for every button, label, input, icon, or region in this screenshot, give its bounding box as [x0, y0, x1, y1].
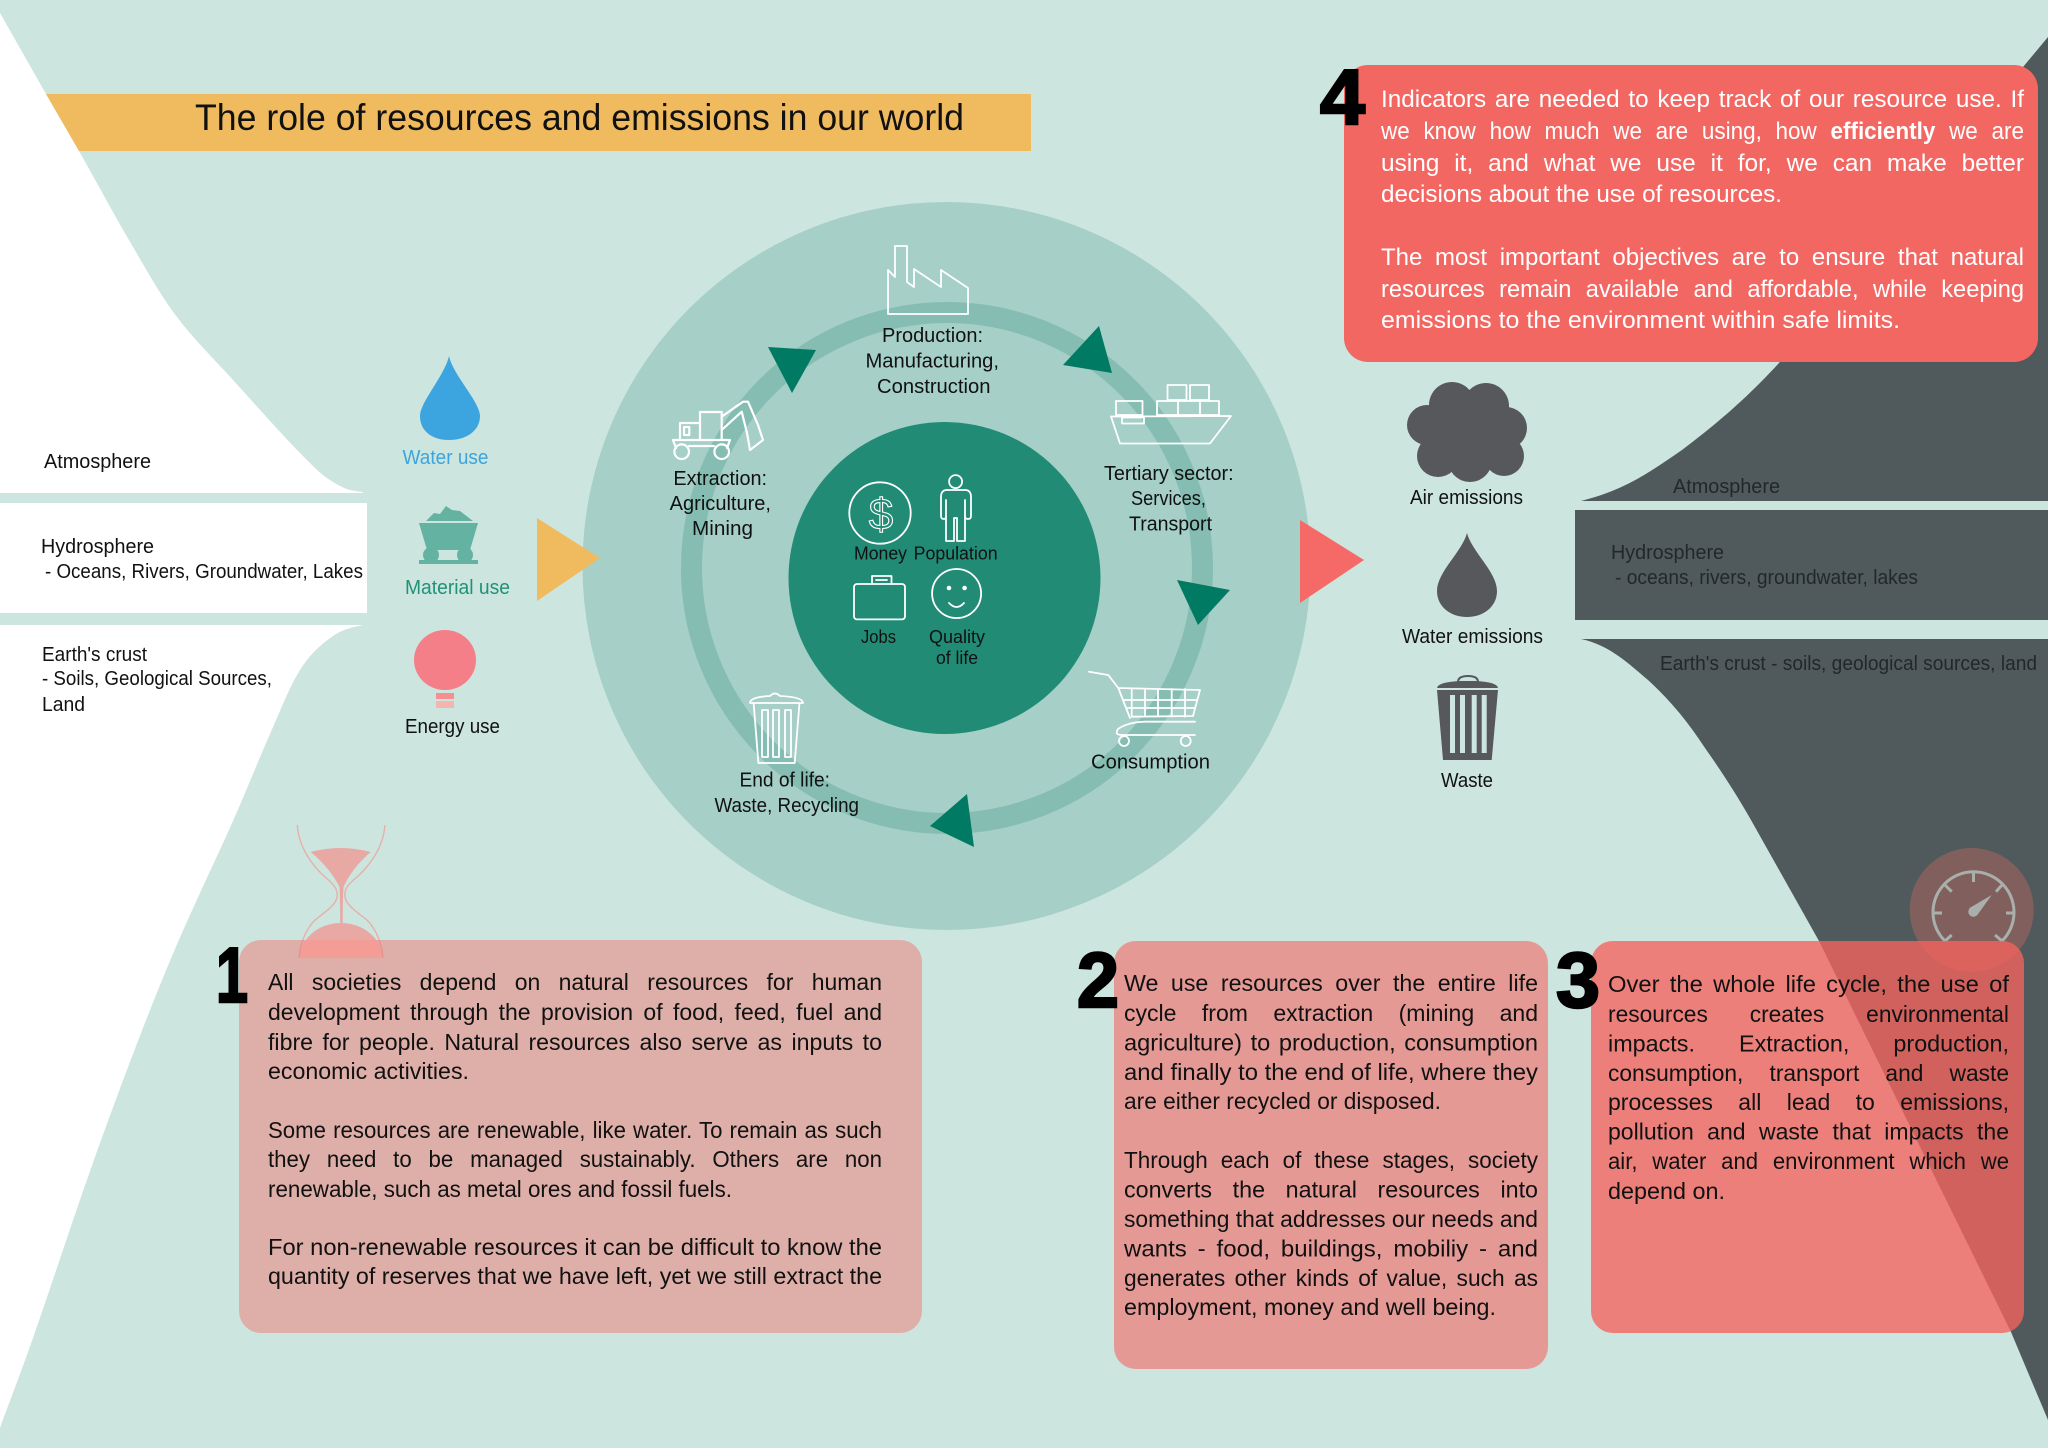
right sphere labels: Earth's crust - soils, geological sources, land: [1660, 653, 2037, 675]
icon: light bulb with energy use label: Energy use: [405, 716, 500, 738]
text: box 2 body: generates other kinds of value, such as: [1124, 1265, 1538, 1291]
icon: quality of life smile: [929, 569, 985, 668]
text: box 2 body: wants - food, buildings, mobiliy - and: [1123, 1236, 1538, 1262]
number 1: 1: [216, 931, 248, 1019]
text: box 1 body: [268, 969, 882, 1289]
icon: factory with production label: Construction: [877, 376, 990, 398]
icon: quality of life smile: of life: [936, 648, 978, 668]
text: box 4 body: The most important objectives are to ensure that natural: [1381, 244, 2024, 271]
icon: dark trash bin with waste label: Waste: [1441, 770, 1493, 792]
icon: factory with production label: Production:: [882, 325, 983, 347]
text: box 1 body: fibre for people. Natural resources also serve as inputs to: [268, 1029, 882, 1055]
arrow: tertiary to consumption: [1177, 580, 1230, 625]
text: box 4 body: Indicators are needed to keep track of our resource use. If: [1381, 86, 2024, 113]
text: box 3 body: depend on.: [1608, 1178, 1725, 1204]
text: box 3 body: air, water and environment which we: [1608, 1148, 2009, 1174]
icon: cargo ship with tertiary sector label: Tertiary sector:: [1104, 463, 1234, 485]
text: box 2 body: [1123, 970, 1539, 1320]
arrow: output from cycle: [1300, 520, 1364, 603]
number 2: 2: [1077, 936, 1119, 1024]
text: box 4 body: using it, and what we use it for, we can make better: [1381, 150, 2024, 177]
text: box 3 body: Over the whole life cycle, the use of: [1608, 971, 2010, 997]
icon: water drop with water use label: Water use: [402, 447, 488, 469]
arrow: input into cycle: [537, 518, 600, 601]
text: box 3 body: processes all lead to emissions,: [1608, 1089, 2009, 1115]
left sphere labels: Atmosphere: [44, 451, 151, 473]
text: box 1 body: economic activities.: [268, 1058, 469, 1084]
icon: population: Population: [914, 544, 998, 564]
icon: mine cart with material use label: [405, 506, 510, 599]
icon: money: $: [869, 490, 893, 539]
icon: mine cart with material use label: Material use: [405, 577, 510, 599]
icon: dark trash bin with waste label: [1437, 676, 1498, 792]
icon: dark drop with water emissions label: Water emissions: [1402, 626, 1543, 648]
life cycle circle: [582, 202, 1310, 930]
text: box 1 body: they need to be managed sustainably. Others are non: [268, 1146, 882, 1172]
right sphere labels: [1611, 476, 2037, 675]
text: box 1 body: All societies depend on natural resources for human: [268, 969, 882, 995]
icon: excavator with extraction label: Extraction:: [673, 468, 767, 490]
right panel: polluted environment spheres: [1575, 37, 2048, 1420]
text: box 2 body: are either recycled or disposed.: [1124, 1088, 1441, 1114]
text: box 4 body: emissions to the environment within safe limits.: [1381, 307, 1900, 334]
icon: money: [849, 482, 911, 564]
text: box 1 body: development through the provision of food, feed, fuel and: [268, 999, 882, 1025]
left panel: natural environment spheres: [0, 13, 367, 1428]
text: box 1 body: quantity of reserves that we have left, yet we still extract the: [268, 1263, 882, 1289]
text: box 4 body: [1380, 86, 2024, 334]
icon: cloud with air emissions label: [1407, 382, 1527, 509]
text: box 3 body: resources creates environmental: [1608, 1001, 2009, 1027]
text: box 3 body: pollution and waste that impacts the: [1608, 1118, 2009, 1144]
icon: trash bin with end of life label: End of life:: [740, 769, 830, 791]
icon: quality of life smile: Quality: [929, 627, 985, 647]
arrow: extraction to production: [768, 347, 816, 393]
icon: jobs briefcase: Jobs: [861, 627, 896, 647]
left sphere labels: - Oceans, Rivers, Groundwater, Lakes: [45, 561, 363, 583]
text: box 2 body: something that addresses our needs and: [1124, 1206, 1538, 1232]
panel: box 1 natural resources: [216, 931, 922, 1333]
text: box 2 body: employment, money and well being.: [1124, 1294, 1496, 1320]
text: box 1 body: For non-renewable resources it can be difficult to know the: [268, 1234, 882, 1260]
icon: trash bin with end of life label: Waste, Recycling: [714, 795, 859, 817]
icon: excavator with extraction label: [670, 402, 771, 540]
right sphere labels: - oceans, rivers, groundwater, lakes: [1615, 567, 1918, 589]
panel: box 4 indicators: [1320, 53, 2038, 362]
panel: box 2 life cycle: [1077, 936, 1548, 1369]
arrow: consumption to end of life: [930, 794, 974, 847]
text: box 4 body: decisions about the use of resources.: [1381, 181, 1782, 208]
icon: shopping cart with consumption label: Consumption: [1091, 752, 1210, 774]
text: box 3 body: impacts. Extraction, production,: [1608, 1030, 2009, 1056]
icon: gauge: [1910, 848, 2034, 972]
icon: trash bin with end of life label: [714, 694, 859, 817]
icon: money: Money: [854, 544, 907, 564]
icon: cargo ship with tertiary sector label: Transport: [1129, 514, 1212, 536]
text: box 3 body: consumption, transport and waste: [1608, 1060, 2009, 1086]
left sphere labels: - Soils, Geological Sources,: [42, 668, 272, 690]
number 3: 3: [1556, 936, 1600, 1024]
text: box 2 body: and finally to the end of life, where they: [1124, 1059, 1539, 1085]
icon: dark drop with water emissions label: [1402, 533, 1543, 648]
left sphere labels: [41, 451, 363, 716]
icon: cargo ship with tertiary sector label: [1104, 385, 1234, 536]
icon: population: [914, 475, 998, 564]
text: box 4 body: we know how much we are using, how efficiently we are: [1380, 118, 2024, 145]
left sphere labels: Earth's crust: [42, 644, 147, 666]
text: box 1 body: Some resources are renewable, like water. To remain as such: [268, 1117, 882, 1143]
icon: excavator with extraction label: Mining: [692, 518, 753, 540]
arrow: production to tertiary: [1063, 326, 1112, 373]
icon: jobs briefcase: [854, 576, 905, 647]
title banner: The role of resources and emissions in our world: [195, 97, 964, 138]
text: box 2 body: converts the natural resources into: [1124, 1176, 1538, 1202]
text: box 2 body: We use resources over the entire life: [1124, 970, 1538, 996]
icon: cloud with air emissions label: Air emissions: [1410, 487, 1523, 509]
text: box 4 body: resources remain available and affordable, while keeping: [1381, 276, 2024, 303]
text: box 2 body: Through each of these stages, society: [1124, 1147, 1538, 1173]
text: box 2 body: cycle from extraction (mining and: [1124, 1000, 1538, 1026]
icon: light bulb with energy use label: [405, 630, 500, 738]
icon: hourglass: [297, 825, 385, 958]
icon: excavator with extraction label: Agriculture,: [670, 493, 771, 515]
icon: factory with production label: [866, 246, 999, 398]
icon: factory with production label: Manufacturing,: [866, 350, 999, 372]
icon: shopping cart with consumption label: [1089, 672, 1210, 774]
icon: water drop with water use label: [402, 356, 488, 469]
text: box 3 body: [1608, 971, 2010, 1204]
panel: box 3 environmental impacts: [1556, 936, 2024, 1333]
title banner: [46, 94, 1031, 151]
right sphere labels: Atmosphere: [1673, 476, 1780, 498]
text: box 1 body: renewable, such as metal ores and fossil fuels.: [268, 1176, 732, 1202]
number 4: 4: [1320, 53, 1365, 141]
text: box 2 body: agriculture) to production, consumption: [1124, 1030, 1538, 1056]
right sphere labels: Hydrosphere: [1611, 542, 1724, 564]
icon: cargo ship with tertiary sector label: Services,: [1131, 488, 1206, 510]
left sphere labels: Hydrosphere: [41, 536, 154, 558]
left sphere labels: Land: [42, 694, 85, 716]
